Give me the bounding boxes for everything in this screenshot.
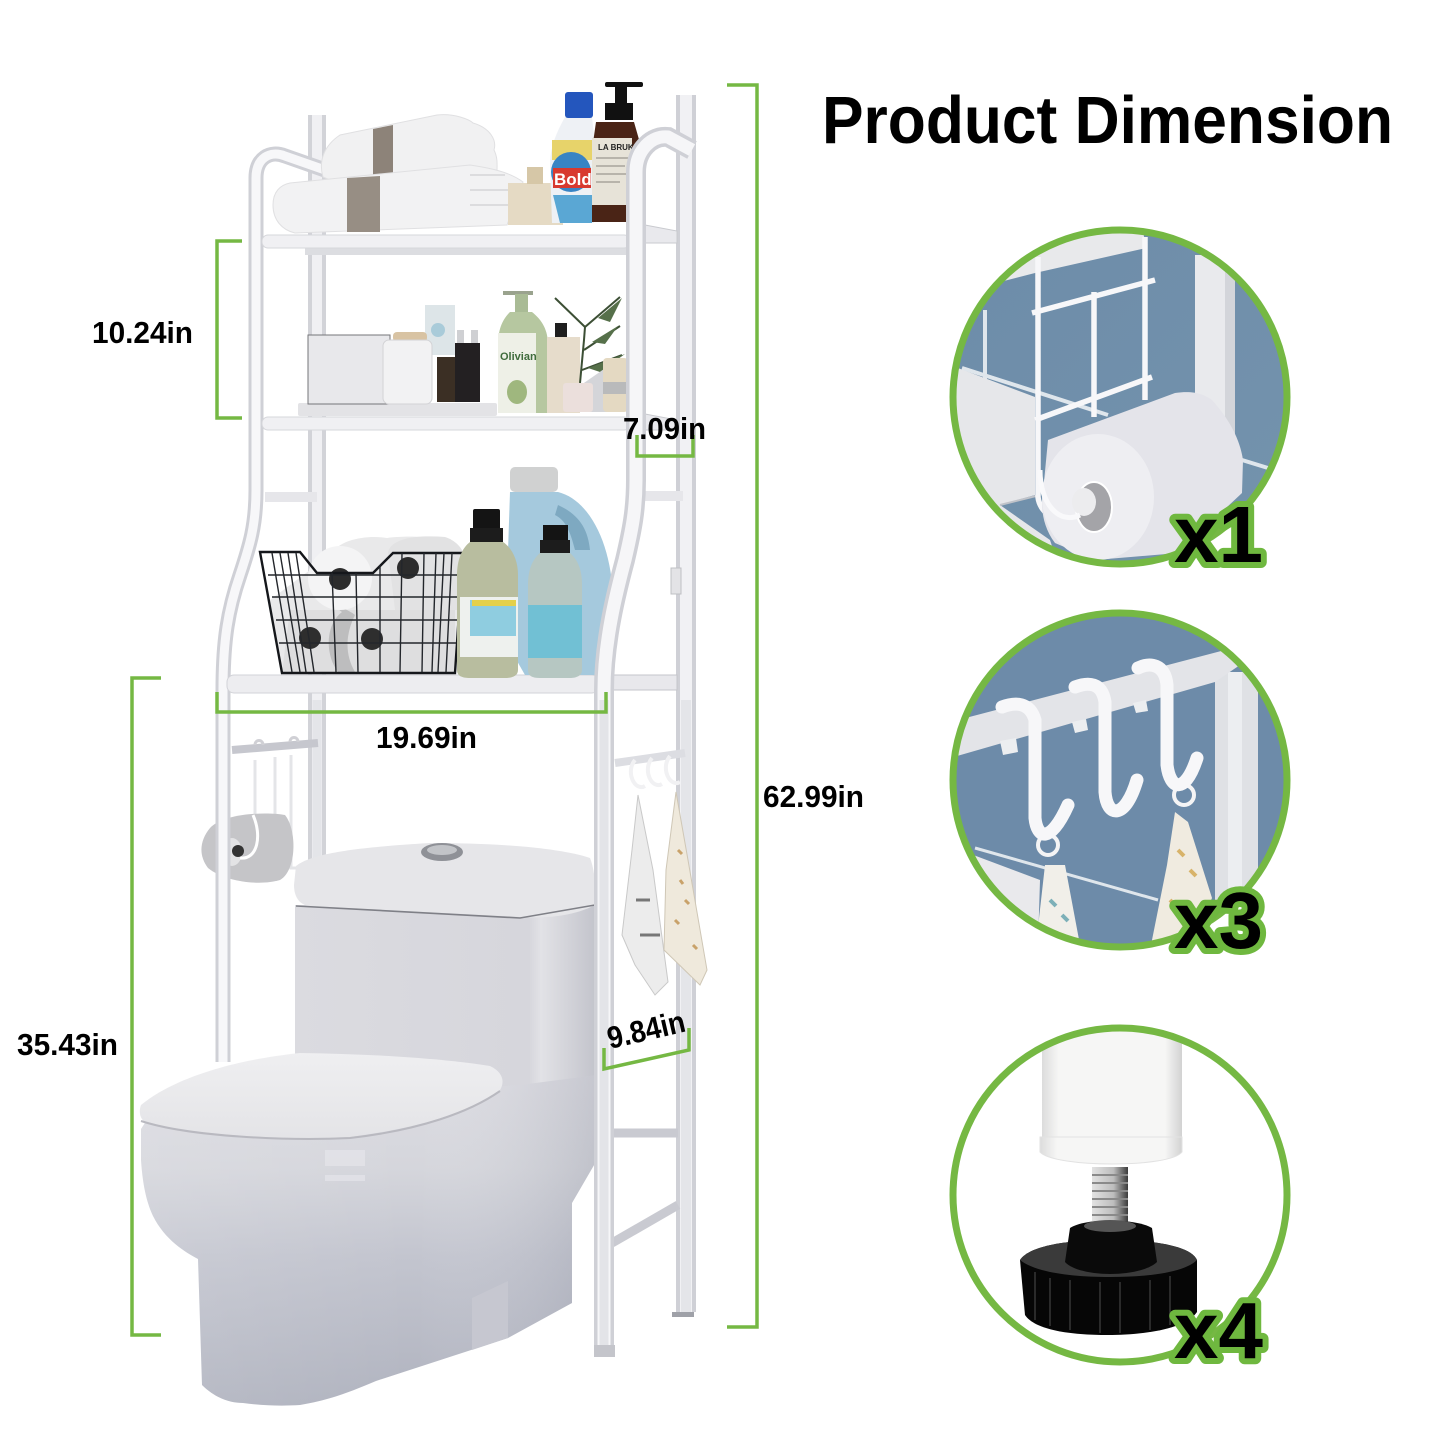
hanging towels [622,756,707,995]
label: 10.24in: 10.24in [92,315,193,350]
right aqua bottle [528,525,582,678]
dimension bracket: 35.43in clearance height [132,678,161,1335]
label: 19.69in: 19.69in [376,720,477,755]
panel: toilet paper holder x1 [950,225,1290,579]
middle shelf items: Olivian [500,351,537,363]
rack back posts [232,95,694,1317]
top shelf bottles: Bold [554,170,592,189]
top shelf towels [273,115,523,233]
laundry jug [505,467,613,675]
panel: hooks x3 [950,610,1290,965]
dimension bracket: 19.69in width [217,692,606,712]
toilet [140,843,597,1406]
dimension bracket: 10.24in shelf gap [217,241,242,418]
dimension bracket: 9.84in clearance depth [604,1028,689,1069]
panel: toilet paper holder x1: x1 [1174,490,1263,579]
toilet paper holder [201,738,320,883]
middle shelf items [298,291,628,416]
title: Product Dimension [822,83,1393,158]
left olive bottle [457,509,518,678]
label: 7.09in: 7.09in [623,411,706,446]
panel: hooks x3: x3 [1174,876,1263,965]
rack shelves [227,225,677,693]
top shelf bottles [508,82,644,225]
dimension bracket: 7.09in depth [637,435,693,456]
panel: adjustable feet x4 [950,1025,1290,1375]
label: 62.99in: 62.99in [763,779,864,814]
panel: adjustable feet x4: x4 [1174,1286,1263,1375]
basket with paper rolls [260,536,463,673]
label: 9.84in: 9.84in [604,1004,689,1056]
rack left front post [223,154,325,1062]
dimension bracket: 62.99in height [727,85,757,1327]
rack right front post [594,137,692,1357]
label: 35.43in: 35.43in [17,1027,118,1062]
top shelf bottles: LA BRUKET [598,143,644,152]
